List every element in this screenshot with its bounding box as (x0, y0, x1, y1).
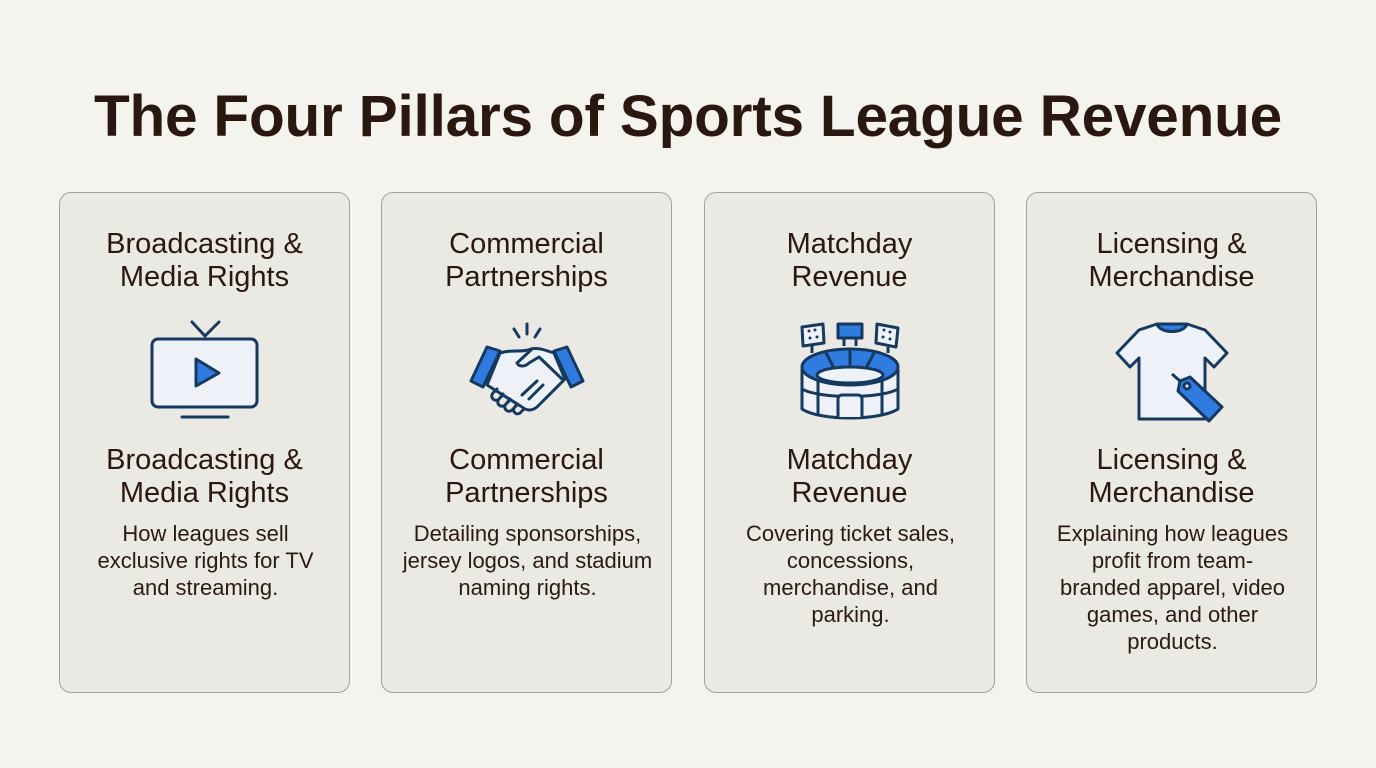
text: licensing (1057, 521, 1288, 654)
heading: matchday top (787, 228, 912, 293)
heading: licensing top (1088, 228, 1255, 293)
title: The Four Pillars of Sports League Revenue (94, 84, 1282, 149)
panel: broadcasting (59, 192, 350, 693)
text: commercial: jersey logos, and stadium (403, 548, 652, 573)
text: licensing: products. (1127, 629, 1218, 654)
text: licensing: profit from team- (1092, 548, 1253, 573)
text: broadcasting: and streaming. (133, 575, 278, 600)
heading: broadcasting bottom (106, 444, 303, 509)
heading: licensing bottom: Merchandise (1088, 477, 1255, 509)
heading: matchday top: Revenue (791, 261, 908, 293)
icon: handshake (469, 322, 585, 416)
icon: stadium (800, 322, 900, 420)
heading: licensing bottom: Licensing & (1097, 444, 1246, 476)
text: matchday: merchandise, and (763, 575, 938, 600)
text: licensing: branded apparel, video (1060, 575, 1285, 600)
text: matchday: concessions, (787, 548, 914, 573)
panel: licensing (1026, 192, 1317, 693)
text: broadcasting (97, 521, 314, 600)
heading: matchday bottom: Revenue (791, 477, 908, 509)
heading: commercial top: Partnerships (445, 261, 608, 293)
text: commercial: Detailing sponsorships, (414, 521, 641, 546)
heading: matchday top: Matchday (787, 228, 912, 260)
heading: matchday bottom (787, 444, 912, 509)
heading: broadcasting top: Broadcasting & (106, 228, 303, 260)
heading: broadcasting top (106, 228, 303, 293)
text: licensing: Explaining how leagues (1057, 521, 1288, 546)
text: commercial: naming rights. (458, 575, 597, 600)
heading: broadcasting top: Media Rights (120, 261, 289, 293)
panel: matchday (704, 192, 995, 693)
heading: commercial top (445, 228, 608, 293)
heading: licensing top: Licensing & (1097, 228, 1246, 260)
heading: broadcasting bottom: Media Rights (120, 477, 289, 509)
heading: commercial bottom (445, 444, 608, 509)
heading: broadcasting bottom: Broadcasting & (106, 444, 303, 476)
text: matchday: Covering ticket sales, (746, 521, 955, 546)
heading: licensing top: Merchandise (1088, 261, 1255, 293)
text: broadcasting: How leagues sell (122, 521, 289, 546)
text: broadcasting: exclusive rights for TV (97, 548, 314, 573)
panel: commercial (381, 192, 672, 693)
heading: licensing bottom (1088, 444, 1255, 509)
icon: tv (150, 320, 258, 418)
text: matchday: parking. (811, 602, 890, 627)
heading: commercial bottom: Partnerships (445, 477, 608, 509)
heading: matchday bottom: Matchday (787, 444, 912, 476)
heading: commercial bottom: Commercial (449, 444, 604, 476)
text: commercial (402, 521, 652, 600)
text: matchday (746, 521, 955, 627)
heading: commercial top: Commercial (449, 228, 604, 260)
text: licensing: games, and other (1087, 602, 1258, 627)
icon: shirt with tag (1115, 322, 1229, 423)
